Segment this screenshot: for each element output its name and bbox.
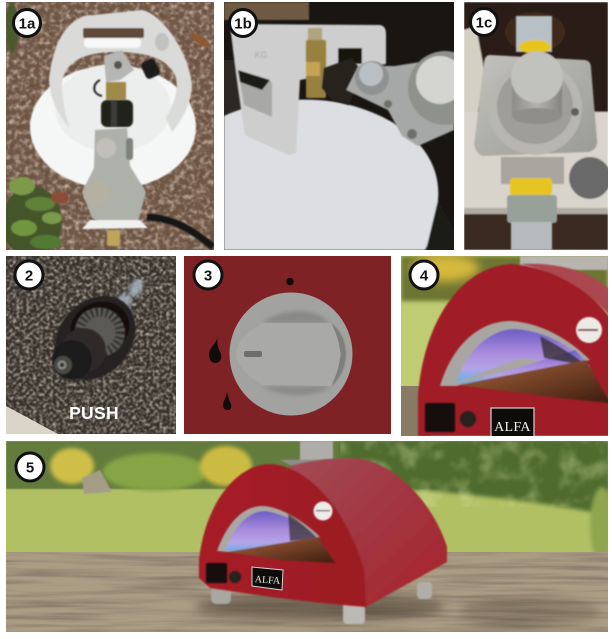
- dark backdrop: [224, 2, 454, 250]
- lower fittings: [501, 157, 564, 250]
- black nut: [322, 58, 362, 105]
- tank valve: [94, 50, 161, 100]
- textured housing: [6, 256, 176, 434]
- step badge 2: [15, 261, 43, 289]
- upper pipe: [516, 16, 552, 54]
- lawn and hedges background: [6, 441, 612, 563]
- bracket, brass fitting and hose: [82, 217, 213, 247]
- step badge 4: 4: [420, 268, 429, 284]
- soil background: [6, 2, 214, 250]
- tank collar: [230, 24, 386, 155]
- step badge 3: [194, 261, 222, 289]
- panel: step 3 control knob: [184, 256, 391, 434]
- tank collar: KG: [254, 50, 268, 60]
- background: [464, 2, 611, 250]
- oven feet: [211, 582, 432, 624]
- oven door opening: [440, 321, 610, 403]
- panel: step 5 complete oven on table in garden: [6, 441, 612, 632]
- panel: step 1c fixed regulator on pipe: [464, 2, 611, 250]
- step badge 1b: 1b: [234, 16, 252, 32]
- panel: step 1a regulator on tank, top view: [2, 2, 214, 258]
- flame symbols: [209, 278, 294, 410]
- step badge 1c: 1c: [476, 14, 492, 32]
- regulator: [345, 50, 454, 146]
- step badge 1a: 1a: [19, 16, 36, 32]
- regulator body: [82, 128, 146, 228]
- step badge 5: 5: [26, 460, 34, 476]
- brass valve: [306, 28, 326, 98]
- oven side: [290, 458, 447, 607]
- ALFA badge: ALFA: [494, 420, 531, 435]
- gas control and knob: [206, 563, 241, 583]
- thermometer: [314, 502, 332, 520]
- regulator body: [474, 51, 597, 156]
- spark smoke: [116, 276, 146, 309]
- foliage: [2, 2, 211, 258]
- flue and flange: [280, 441, 352, 468]
- blurred garden background: [401, 254, 608, 436]
- oven door opening: [217, 506, 335, 563]
- panel: step 4 burner lit close-up: [401, 254, 610, 438]
- step badge 1a: [14, 10, 40, 36]
- red panel: [184, 256, 391, 434]
- step badge 5: [16, 453, 44, 481]
- ALFA badge: [491, 408, 534, 438]
- ALFA badge: [252, 567, 283, 590]
- step badge 4: [410, 261, 438, 289]
- oven dome: [418, 264, 610, 436]
- step badge 1b: [230, 10, 256, 36]
- step badge 2: 2: [25, 268, 33, 284]
- oven front: [199, 464, 366, 607]
- step badge 3: 3: [204, 268, 212, 284]
- gas control and knob: [425, 403, 476, 432]
- ALFA badge: ALFA: [254, 574, 281, 587]
- white tank: [30, 64, 196, 189]
- white tank: [224, 100, 454, 250]
- PUSH label: PUSH: [69, 403, 119, 423]
- gas control knob: [230, 292, 352, 416]
- black nut: [101, 100, 133, 127]
- step badge 1c: [470, 8, 498, 36]
- panel: step 1b regulator on tank, side view: [224, 2, 454, 250]
- tank collar: [49, 10, 192, 132]
- panel: step 2 push the ignition button: [6, 256, 176, 434]
- wooden table: [6, 552, 608, 632]
- thermometer: [576, 317, 602, 343]
- ignition button: [51, 295, 136, 381]
